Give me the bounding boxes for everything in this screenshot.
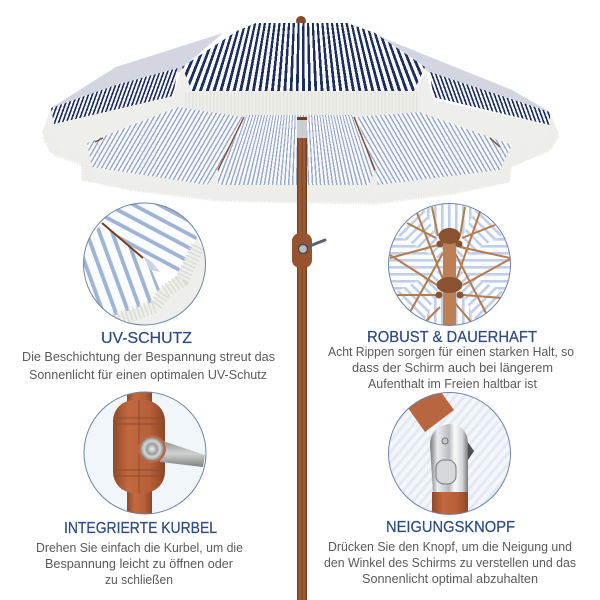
lower left panel [87, 107, 243, 185]
canopy ribs [95, 117, 500, 170]
fabric lower panel [80, 223, 160, 316]
text block: Neigungsknopf: Drücken Sie den Knopf, um die Neigung und [328, 540, 572, 554]
pole [296, 16, 307, 600]
lower centre panel [218, 115, 375, 185]
dark fin [468, 442, 474, 460]
circle: ribs detail [388, 203, 511, 326]
text block: Kurbel: zu schließen [105, 573, 173, 587]
lower hub [436, 277, 464, 298]
rib [102, 223, 143, 258]
text block: Kurbel [36, 541, 243, 587]
text block: Robust [328, 345, 574, 391]
text block: Kurbel: Bespannung leicht zu öffnen oder [45, 557, 233, 571]
ribs [390, 207, 512, 323]
left navy panel [51, 68, 178, 124]
heading: Neigungsknopf: NEIGUNGSKNOPF [386, 519, 515, 536]
umbrella canopy [42, 23, 560, 204]
text block: UV-Schutz [22, 350, 275, 382]
lower wood segment [432, 492, 468, 514]
central pole [443, 242, 456, 325]
circle: UV fabric detail [83, 202, 206, 326]
fringe detail [112, 238, 205, 324]
heading: UV-Schutz: UV-SCHUTZ [101, 330, 192, 347]
pole collar [297, 117, 307, 138]
button [436, 460, 456, 484]
metal hinge [430, 424, 468, 493]
handle [160, 440, 205, 467]
text block: Kurbel: Drehen Sie einfach die Kurbel, um die [36, 541, 243, 555]
screw [442, 438, 448, 444]
lower right panel [356, 112, 512, 185]
fringe [42, 67, 559, 203]
housing necks [127, 392, 152, 402]
heading: Robust & Dauerhaft: ROBUST & DAUERHAFT [367, 329, 537, 346]
text block: Neigungsknopf [324, 540, 576, 586]
upper wood segment [408, 394, 454, 432]
text block: UV-Schutz: Die Beschichtung der Bespannung streut das [22, 350, 275, 364]
top navy panel [182, 23, 425, 91]
knob [138, 435, 166, 463]
crank housing [113, 400, 165, 493]
heading: Integrierte Kurbel: INTEGRIERTE KURBEL [64, 520, 217, 537]
text block: UV-Schutz: Sonnenlicht für einen optimalen UV-Schutz [29, 368, 267, 382]
fabric upper panel [104, 204, 197, 272]
text block: Robust: Aufenthalt im Freien haltbar ist [368, 377, 538, 391]
text block: Neigungsknopf: Sonnenlicht optimal abzuhalten [362, 572, 538, 586]
circle: tilt button detail [388, 388, 512, 518]
text block: Robust: Acht Rippen sorgen für einen starken Halt, so [328, 345, 574, 359]
text block: Robust: dass der Schirm auch bei längerem [352, 361, 553, 375]
text block: Neigungsknopf: den Winkel des Schirms zu verstellen und das [324, 556, 576, 570]
fold [143, 256, 160, 272]
circle: crank detail [83, 390, 207, 516]
upper hub [436, 228, 462, 248]
pole in front of lower panels [297, 118, 307, 204]
right navy panel [430, 72, 550, 125]
canopy shaded upper slopes [51, 33, 550, 112]
crank housing on pole [292, 233, 325, 268]
